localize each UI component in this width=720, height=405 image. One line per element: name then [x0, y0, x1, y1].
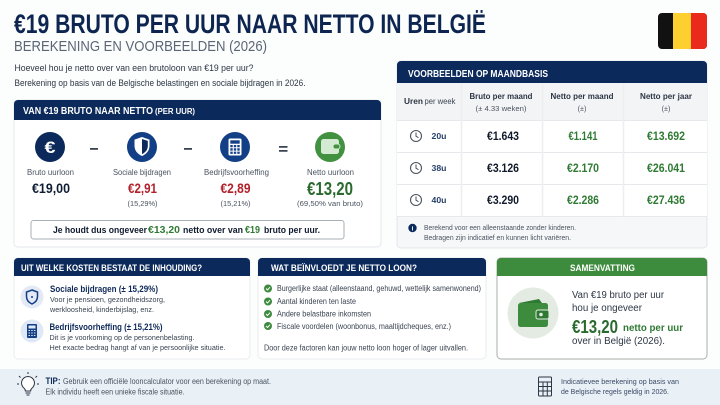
labels: Sociale bijdragen	[113, 168, 171, 177]
intro text: Hoeveel hou je netto over van een brutoloon van €19 per uur?	[14, 63, 254, 73]
closing note: Door deze factoren kan jouw netto loon hoger of lager uitvallen.	[264, 344, 468, 352]
disclaimer: de Belgische regels geldig in 2026.	[561, 387, 669, 396]
summary text: netto per uur	[623, 323, 683, 334]
summary text: Van €19 bruto per uur	[572, 290, 665, 301]
table column headings: (±)	[662, 104, 670, 113]
summary text: €13,20	[572, 317, 618, 337]
item: sociale bijdragen: Voor je pensioen, gezondheidszorg,	[50, 295, 165, 304]
table column headings: (± 4.33 weken)	[476, 104, 526, 113]
panel header	[258, 258, 486, 276]
icon: shield	[127, 132, 157, 162]
row: 38u: €2.170	[567, 161, 599, 175]
table column headings: Uren	[404, 97, 423, 106]
icon: light bulb	[17, 372, 39, 395]
callout: netto over van	[183, 225, 243, 235]
icon: wallet	[315, 132, 345, 162]
percentages: (15,29%)	[128, 199, 158, 208]
panel header	[14, 100, 381, 120]
checklist: Fiscale voordelen (woonbonus, maaltijdcheques, enz.)	[277, 322, 451, 331]
row: 38u: €3.126	[487, 161, 519, 175]
row: 38u: 38u	[432, 163, 446, 173]
panel header: VAN €19 BRUTO NAAR NETTO	[23, 106, 153, 117]
footer band	[0, 369, 720, 405]
row: 40u	[410, 193, 685, 207]
labels	[27, 168, 354, 177]
callout: €19	[245, 225, 260, 236]
summary text: hou je ongeveer	[572, 303, 643, 314]
checklist: Andere belastbare inkomsten	[277, 310, 371, 318]
labels: Bruto uurloon	[27, 168, 74, 177]
title: €19 BRUTO PER UUR NAAR NETTO IN BELGIË	[14, 9, 486, 39]
callout: €13,20	[148, 225, 180, 236]
row: 20u: €13.692	[647, 129, 685, 143]
icon: Belgian flag	[658, 13, 707, 49]
values: €2,91	[128, 181, 157, 196]
row: 20u: €1.643	[487, 129, 519, 143]
panel: uit welke kosten	[14, 258, 250, 359]
panel: van bruto naar netto	[14, 100, 381, 247]
values	[32, 179, 353, 199]
table body	[397, 83, 707, 217]
labels: Bedrijfsvoorheffing	[204, 168, 269, 177]
panel header: WAT BEÏNVLOEDT JE NETTO LOON?	[271, 263, 417, 274]
table column headings: Bruto per maand	[470, 92, 532, 101]
row: 20u: 20u	[432, 131, 446, 141]
intro text	[14, 63, 306, 88]
values: €19,00	[32, 181, 70, 196]
panel header	[14, 258, 250, 276]
icon: wallet	[508, 288, 558, 338]
summary text: over in België (2026).	[572, 336, 665, 347]
table header bar	[397, 61, 707, 83]
intro text: Berekening op basis van de Belgische belastingen en sociale bijdragen in 2026.	[14, 78, 306, 88]
table column headings: Netto per jaar	[640, 92, 693, 101]
row: 38u: €26.041	[647, 161, 685, 175]
item: bedrijfsvoorheffing: Dit is je voorkoming op de personenbelasting.	[50, 333, 194, 342]
percentages	[128, 199, 363, 208]
panel: voorbeelden op maandbasis	[397, 61, 707, 248]
checklist: Aantal kinderen ten laste	[277, 297, 356, 306]
panel header: SAMENVATTING	[570, 263, 635, 274]
item: sociale bijdragen: werkloosheid, kinderbijslag, enz.	[49, 305, 154, 314]
disclaimer	[561, 377, 679, 396]
icon: euro	[35, 132, 65, 162]
item: bedrijfsvoorheffing: Het exacte bedrag hangt af van je persoonlijke situatie.	[50, 343, 226, 352]
callout: Je houdt dus ongeveer	[53, 225, 147, 235]
panel header: (PER UUR)	[155, 107, 195, 116]
icon: euro: €	[44, 138, 56, 157]
panel header	[497, 258, 707, 276]
equals sign	[279, 146, 288, 152]
callout	[31, 220, 344, 239]
icon: calculator	[220, 132, 250, 162]
panel: samenvatting	[497, 258, 707, 359]
values: €13,20	[307, 179, 353, 199]
tip text	[46, 376, 271, 396]
row: 38u	[410, 161, 685, 175]
panel: wat beinvloedt je netto loon	[258, 258, 486, 359]
table note: Berekend voor een alleenstaande zonder kinderen.	[424, 223, 576, 232]
minus sign	[90, 148, 98, 150]
summary text	[572, 290, 683, 347]
table note: Bedragen zijn indicatief en kunnen licht variëren.	[424, 233, 571, 242]
percentages: (15,21%)	[220, 199, 251, 208]
labels: Netto uurloon	[307, 168, 354, 177]
row: 40u: €2.286	[567, 193, 599, 207]
table note: i	[412, 226, 414, 232]
table note	[408, 223, 576, 242]
table header bar: VOORBEELDEN OP MAANDBASIS	[408, 69, 548, 80]
row: 20u: €1.141	[568, 129, 598, 143]
row: 40u: 40u	[432, 195, 446, 205]
checklist	[264, 284, 481, 331]
item: bedrijfsvoorheffing	[20, 320, 226, 352]
percentages: (69,50% van bruto)	[297, 199, 363, 208]
table column headings: per week	[424, 97, 456, 106]
tip text: TIP:	[46, 376, 61, 386]
item: sociale bijdragen	[20, 284, 165, 314]
panel header: UIT WELKE KOSTEN BESTAAT DE INHOUDING?	[21, 263, 202, 274]
table column headings	[397, 83, 707, 120]
table column headings: Netto per maand	[550, 92, 614, 101]
row: 40u: €27.436	[647, 193, 685, 207]
callout: bruto per uur.	[264, 225, 320, 235]
icon: calculator	[538, 377, 552, 396]
values: €2,89	[220, 181, 250, 196]
tip text: Gebruik een officiële looncalculator voor een berekening op maat.	[63, 377, 271, 386]
tip text: Elk individu heeft een unieke fiscale situatie.	[46, 388, 184, 396]
row: 40u: €3.290	[487, 193, 519, 207]
table column headings: (±)	[578, 104, 586, 113]
minus sign	[184, 148, 192, 150]
subtitle: BEREKENING EN VOORBEELDEN (2026)	[14, 39, 267, 55]
disclaimer: Indicatievee berekening op basis van	[561, 377, 679, 386]
item: bedrijfsvoorheffing: Bedrijfsvoorheffing (± 15,21%)	[50, 322, 162, 332]
item: sociale bijdragen: Sociale bijdragen (± 15,29%)	[50, 284, 158, 294]
row: 20u	[410, 129, 685, 143]
checklist: Burgerlijke staat (alleenstaand, gehuwd, wettelijk samenwonend)	[277, 284, 481, 293]
